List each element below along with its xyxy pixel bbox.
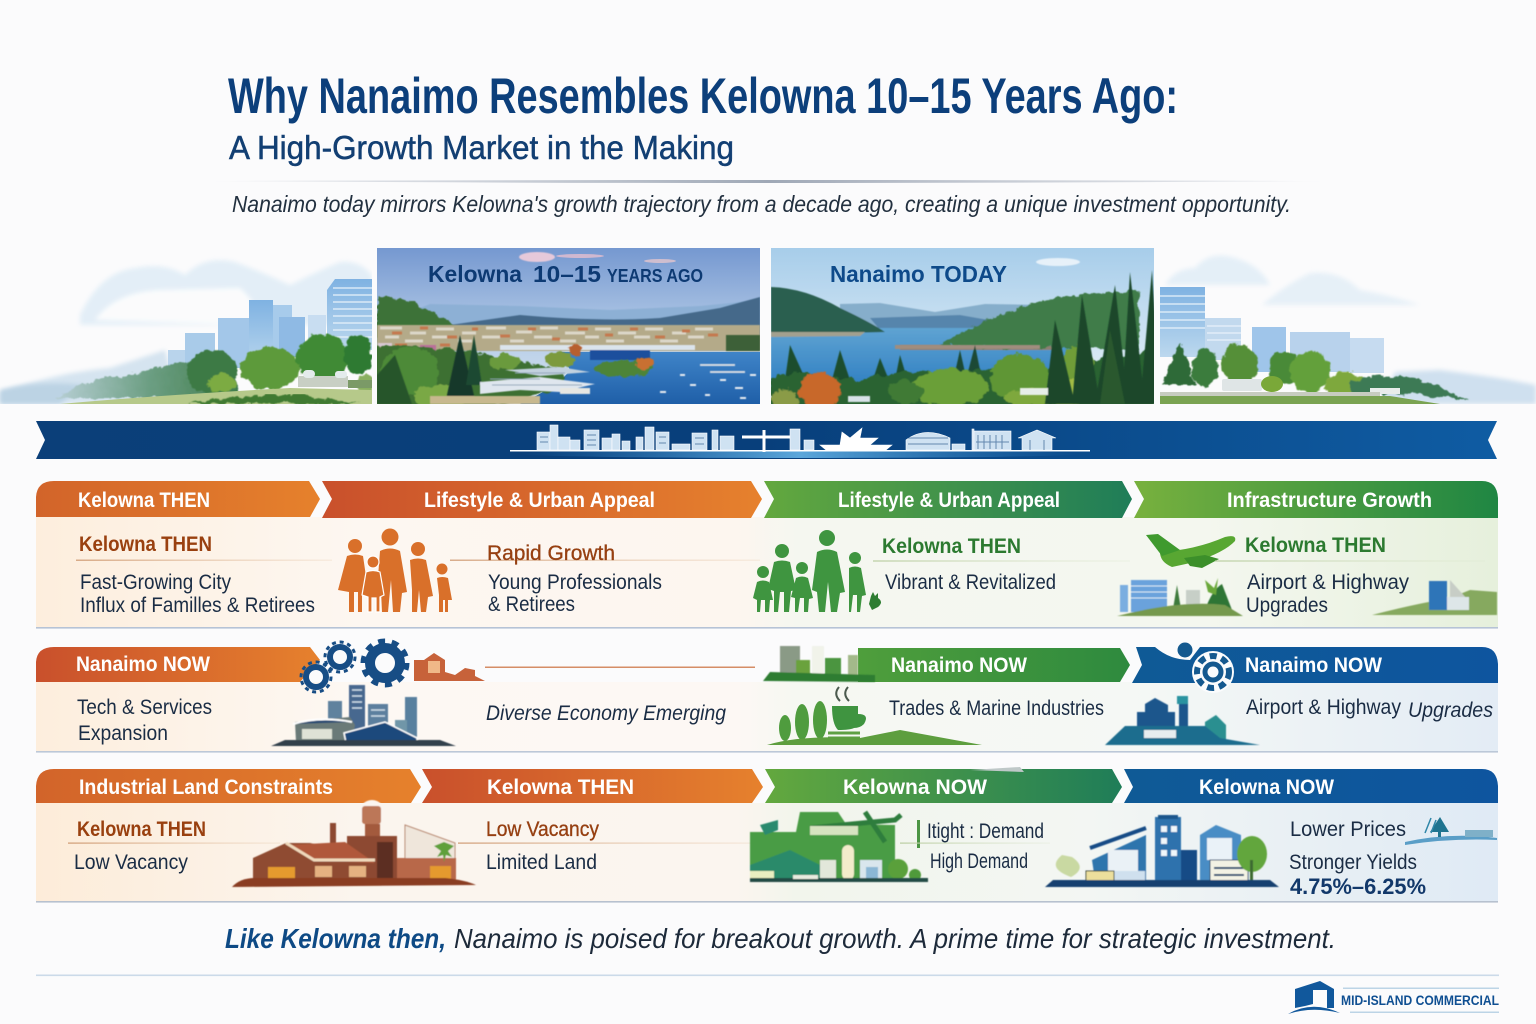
- title: Why Nanaimo Resembles Kelowna 10–15 Years Ago:: [228, 68, 1178, 124]
- icon: blue gear: [1192, 651, 1234, 693]
- header: Nanaimo NOW, blue: Nanaimo NOW: [1245, 654, 1382, 677]
- photo: Kelowna 10-15 years ago: [370, 248, 760, 410]
- right city panorama: [1160, 256, 1536, 404]
- icon: skyline and harbour: [537, 425, 1056, 452]
- text block: Kelowna then, city: Fast-Growing City: [80, 571, 231, 594]
- text block: vibrant: Kelowna THEN: [882, 535, 1021, 558]
- text block: vibrant: Vibrant & Revitalized: [885, 571, 1056, 594]
- text block: rapid growth: Young Professionals: [488, 571, 662, 594]
- header: Industrial Land Constraints: [36, 769, 421, 803]
- header: Kelowna THEN: [422, 769, 763, 803]
- row 3 panel: [36, 767, 1498, 903]
- header: Lifestyle and Urban Appeal, green: [764, 481, 1132, 518]
- icon: city and industry: [271, 685, 456, 746]
- header: Lifestyle and Urban Appeal, green: Lifestyle & Urban Appeal: [838, 489, 1060, 512]
- icon: green family: [753, 530, 881, 612]
- header: Kelowna NOW, green: [765, 767, 1122, 803]
- text: airport row 2: Upgrades: [1408, 699, 1493, 722]
- text block: Kelowna low vacancy: Kelowna THEN: [77, 818, 206, 841]
- icon: city and park: [1117, 578, 1243, 616]
- icon: orange family: [338, 528, 452, 612]
- text: airport row 2: [1246, 696, 1493, 722]
- header: Nanaimo NOW, orange: Nanaimo NOW: [76, 653, 210, 676]
- icon: small orange plant: [414, 653, 485, 681]
- icon: gears: [301, 641, 407, 692]
- icon: cup and trees: [767, 687, 982, 745]
- header: Nanaimo NOW, green: Nanaimo NOW: [891, 654, 1027, 677]
- text block: lower prices and yields: 4.75%–6.25%: [1290, 874, 1426, 899]
- header: Lifestyle and Urban Appeal, orange: [322, 481, 762, 518]
- text block: airport and highway: [1215, 534, 1485, 617]
- left city panorama: [0, 260, 373, 404]
- text block: rapid growth: & Retirees: [488, 593, 575, 616]
- text block: low vacancy: [458, 818, 757, 874]
- text block: rapid growth: Rapid Growth: [487, 542, 615, 565]
- header: Kelowna THEN: Kelowna THEN: [487, 776, 634, 799]
- tagline: Nanaimo today mirrors Kelowna's growth trajectory from a decade ago, creating a unique investment opportunity.: [232, 191, 1291, 217]
- header: Nanaimo NOW, orange: [36, 647, 320, 682]
- text block: Kelowna then, city: Kelowna THEN: [79, 533, 212, 556]
- text block: airport and highway: Airport & Highway: [1247, 571, 1409, 594]
- text block: tight demand: [900, 820, 1050, 873]
- icon: port buildings: [1105, 696, 1260, 745]
- text block: lower prices and yields: [1289, 818, 1426, 899]
- photo heading: Kelowna: Kelowna: [428, 261, 522, 287]
- logo wordmark: MID-ISLAND COMMERCIAL: [1341, 993, 1499, 1008]
- text block: tech and services: Expansion: [78, 722, 168, 745]
- header: Lifestyle and Urban Appeal, orange: Lifestyle & Urban Appeal: [424, 489, 655, 512]
- icon: terminal building: [1372, 580, 1497, 615]
- text block: Kelowna low vacancy: Low Vacancy: [74, 851, 188, 874]
- header: Infrastructure Growth: Infrastructure Growth: [1227, 489, 1432, 512]
- text block: Kelowna then, city: Influx of Familles & Retirees: [80, 594, 315, 617]
- icon: green skyline: [763, 646, 875, 682]
- header: Industrial Land Constraints: Industrial Land Constraints: [79, 776, 333, 799]
- photo heading: Nanaimo: Nanaimo TODAY: [830, 261, 1007, 287]
- text block: lower prices and yields: Lower Prices: [1290, 818, 1406, 841]
- closing statement: Nanaimo is poised for breakout growth. A prime time for strategic investment.: [454, 923, 1336, 954]
- text block: Kelowna low vacancy: [68, 818, 280, 874]
- photo heading: Kelowna: YEARS AGO: [607, 266, 703, 286]
- header: Infrastructure Growth: [1134, 481, 1498, 518]
- text block: low vacancy: Limited Land: [486, 851, 597, 874]
- logo: [1288, 981, 1499, 1014]
- icon: shoreline: [1405, 817, 1497, 845]
- text: diverse economy: Diverse Economy Emerging: [486, 702, 726, 725]
- row 2 panel: [36, 641, 1498, 753]
- header: Nanaimo NOW, green: [858, 648, 1130, 682]
- text: trades: Trades & Marine Industries: [889, 697, 1104, 720]
- header: Kelowna THEN: Kelowna THEN: [78, 489, 210, 512]
- text block: vibrant: [873, 535, 1130, 594]
- header: Kelowna NOW, blue: [1124, 769, 1498, 803]
- text block: airport and highway: Upgrades: [1246, 594, 1328, 617]
- icon: airplane: [1146, 534, 1235, 568]
- text block: low vacancy: Low Vacancy: [486, 818, 599, 841]
- icon: brown factory: [232, 800, 476, 887]
- header: Nanaimo NOW, blue: [1132, 642, 1498, 683]
- header: Kelowna NOW, green: Kelowna NOW: [843, 776, 987, 799]
- subtitle: A High-Growth Market in the Making: [229, 129, 734, 166]
- photo heading: Kelowna: 10–15: [533, 261, 601, 287]
- text block: tech and services: Tech & Services: [77, 696, 212, 719]
- header: Kelowna THEN: [36, 481, 320, 517]
- icon: logo house: [1288, 981, 1340, 1014]
- text block: lower prices and yields: Stronger Yields: [1289, 851, 1417, 874]
- text: airport row 2: Airport & Highway: [1246, 696, 1401, 719]
- header: Kelowna NOW, blue: Kelowna NOW: [1199, 776, 1334, 799]
- text block: airport and highway: Kelowna THEN: [1245, 534, 1386, 557]
- banner ribbon: [36, 421, 1497, 459]
- row 1 panel: [36, 481, 1498, 629]
- icon: blue buildings: [1045, 815, 1279, 887]
- text block: tight demand: Itight : Demand: [927, 820, 1044, 843]
- text block: tech and services: [77, 696, 212, 745]
- text block: Kelowna then, city: [76, 533, 332, 617]
- icon: green construction: [750, 812, 928, 882]
- text block: rapid growth: [450, 542, 760, 616]
- text block: tight demand: High Demand: [930, 850, 1028, 873]
- photo: Nanaimo today: [771, 248, 1160, 410]
- closing statement: Like Kelowna then,: [225, 923, 446, 954]
